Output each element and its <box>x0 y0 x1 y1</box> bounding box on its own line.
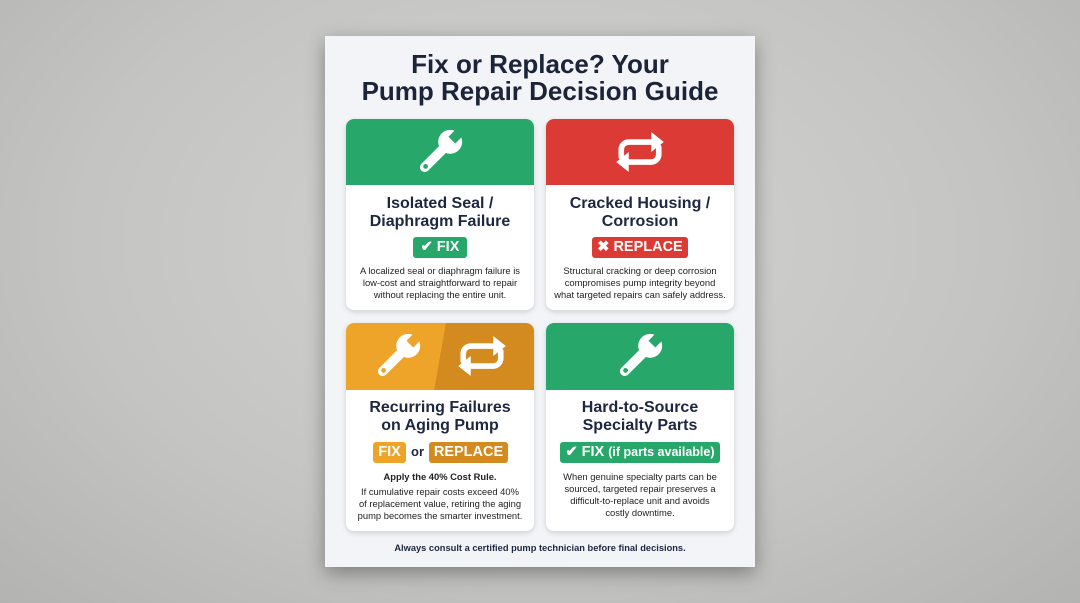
card title: Corrosion <box>602 213 678 230</box>
panel: specialty parts <box>546 323 734 531</box>
panel: recurring failures <box>346 323 534 531</box>
badges: fix or replace: REPLACE <box>434 444 503 460</box>
card title: Recurring Failures <box>369 399 511 416</box>
header: green with wrench <box>346 119 534 185</box>
icon: replace arrows <box>616 132 664 172</box>
body text <box>360 265 520 300</box>
badge: fix if parts: ✔ FIX (if parts available) <box>565 444 715 460</box>
title: Pump Repair Decision Guide <box>362 76 718 106</box>
header: green with wrench <box>546 323 734 390</box>
badge: replace: ✖ REPLACE <box>597 239 683 255</box>
body text <box>563 471 717 518</box>
card title: Hard-to-Source <box>582 399 698 416</box>
card title <box>370 195 510 230</box>
title <box>362 49 718 106</box>
footer note: Always consult a certified pump technician before final decisions. <box>394 543 686 553</box>
card title: Specialty Parts <box>583 417 697 434</box>
body text: When genuine specialty parts can be <box>563 471 717 482</box>
badge: fix <box>413 237 467 258</box>
body text: pump becomes the smarter investment. <box>358 510 522 521</box>
body text: of replacement value, retiring the aging <box>359 498 521 509</box>
badge: replace <box>592 237 688 258</box>
body text <box>358 486 522 521</box>
header: orange split <box>346 323 534 390</box>
header: red with repeat <box>546 119 734 185</box>
body text: sourced, targeted repair preserves a <box>564 483 716 494</box>
rule text: Apply the 40% Cost Rule. <box>383 471 497 482</box>
body text: compromises pump integrity beyond <box>565 277 715 288</box>
card title: Cracked Housing / <box>570 195 710 212</box>
card title: on Aging Pump <box>381 417 499 434</box>
body text: low-cost and straightforward to repair <box>363 277 517 288</box>
icon: wrench <box>420 130 462 172</box>
card title <box>369 399 511 434</box>
icon: wrench <box>620 334 662 376</box>
body text: difficult-to-replace unit and avoids <box>570 495 710 506</box>
body text: what targeted repairs can safely address. <box>554 289 726 300</box>
body text: Structural cracking or deep corrosion <box>563 265 717 276</box>
icon: wrench <box>371 325 429 383</box>
title: Fix or Replace? Your <box>411 49 669 79</box>
card title: Diaphragm Failure <box>370 213 510 230</box>
body text: without replacing the entire unit. <box>374 289 506 300</box>
panel: cracked housing <box>546 119 734 310</box>
body text <box>554 265 726 300</box>
body text: costly downtime. <box>605 507 675 518</box>
body text: A localized seal or diaphragm failure is <box>360 265 520 276</box>
badges: fix or replace: FIX <box>378 444 401 460</box>
poster <box>325 36 755 567</box>
badges: fix or replace: or <box>411 444 424 459</box>
badges: fix or replace <box>373 442 508 463</box>
card title <box>570 195 710 230</box>
card title <box>582 399 698 434</box>
body text: If cumulative repair costs exceed 40% <box>361 486 519 497</box>
panel: isolated seal <box>346 119 534 310</box>
card title: Isolated Seal / <box>387 195 493 212</box>
badge: fix: ✔ FIX <box>421 239 459 255</box>
